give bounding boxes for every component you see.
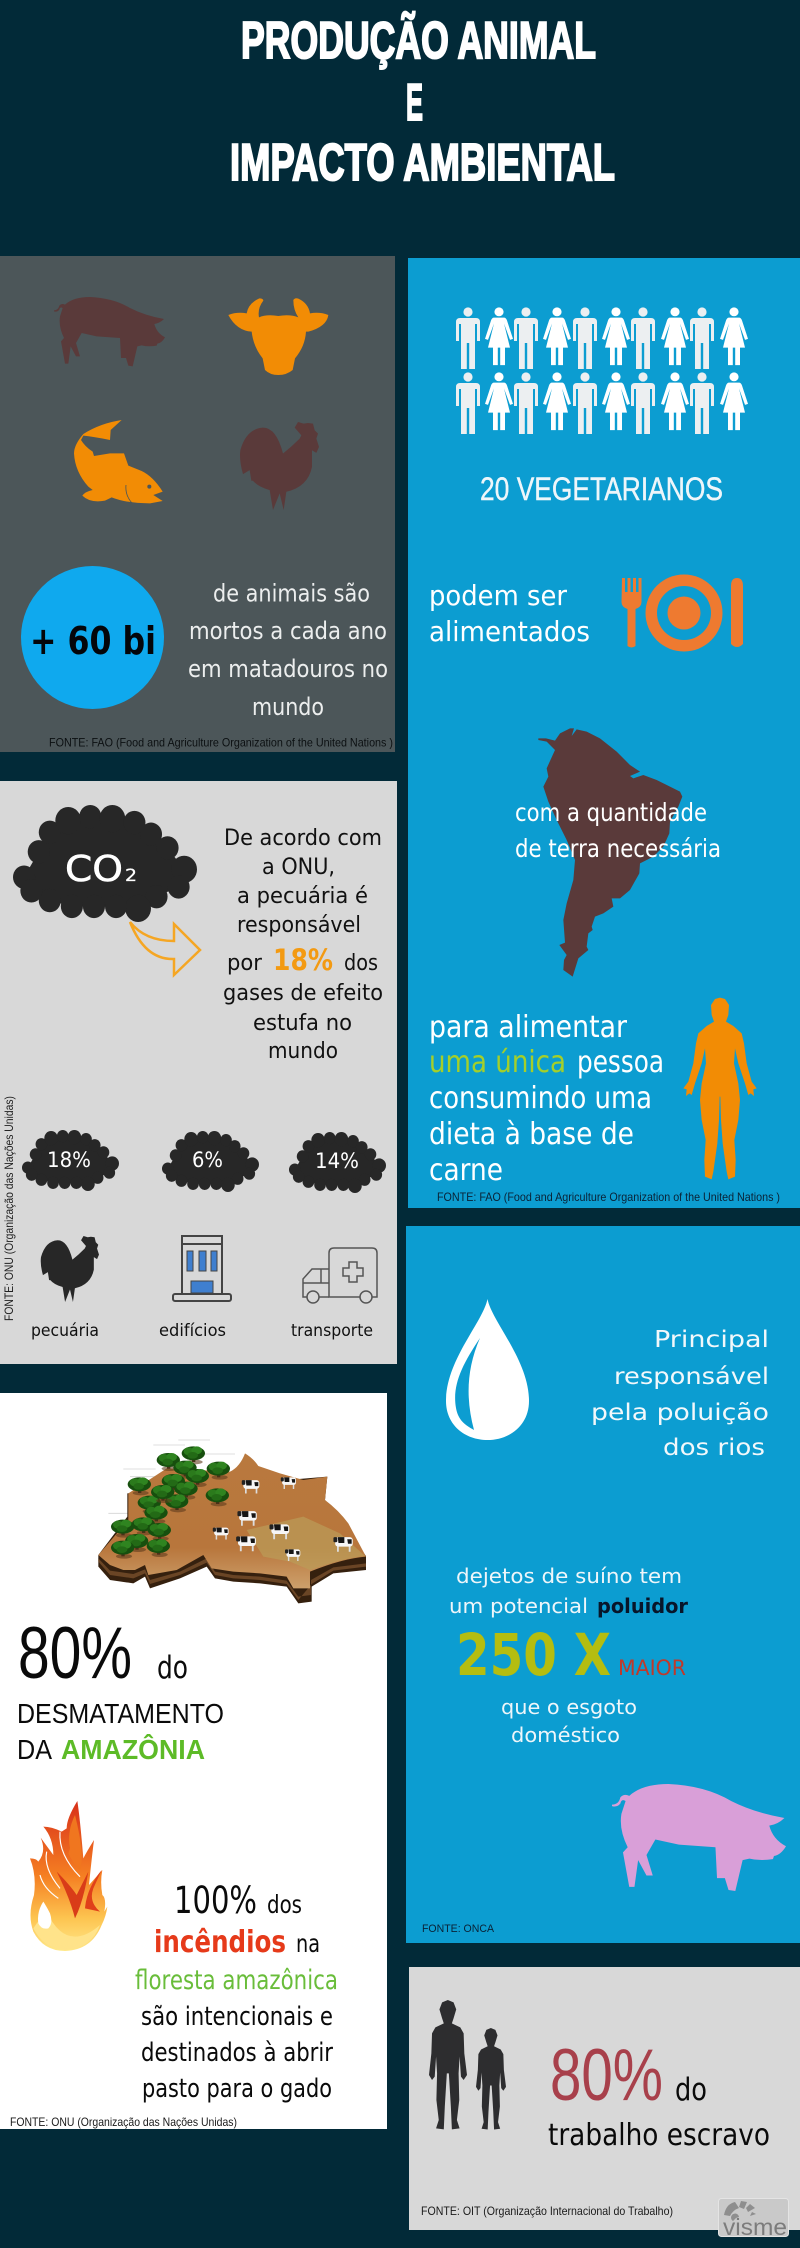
icon: row of people (456, 307, 748, 434)
text: fires: 100% (174, 1879, 257, 1922)
stat: 80% deforestation: DESMATAMENTO (17, 1698, 224, 1729)
badge: visme logo (718, 2198, 788, 2240)
text: fires (135, 1879, 338, 2104)
icon: pink pig (612, 1784, 786, 1891)
panel: slave labour (409, 1967, 800, 2230)
cloud: 14%: 14% (315, 1149, 359, 1173)
text: podem ser alimentados (429, 579, 590, 648)
stat: 80% deforestation: AMAZÔNIA (61, 1733, 205, 1765)
stat: 80% slave labour (548, 2035, 770, 2153)
icon: ambulance (303, 1248, 377, 1303)
cloud: 14% (289, 1132, 386, 1193)
text: principal responsavel: pela poluição (591, 1400, 769, 1426)
labels: sectors: edifícios (159, 1321, 226, 1341)
icon: South America (538, 728, 682, 977)
cloud: 18% (22, 1130, 119, 1191)
icon: pig (54, 297, 165, 366)
text: swine waste stat (449, 1564, 688, 1747)
heading: 20 vegetarianos: 20 VEGETARIANOS (480, 471, 723, 507)
panel: deforestation (0, 1393, 387, 2129)
text: swine waste stat: um potencial (449, 1594, 588, 1618)
arrow (130, 922, 200, 975)
icon: adult and child (429, 2000, 506, 2129)
illustration: deforested Brazil map with cattle (98, 1440, 366, 1603)
text: para alimentar: pessoa (577, 1045, 664, 1080)
text: principal responsavel: Principal (654, 1327, 769, 1353)
panel: vegetarians (408, 258, 800, 1208)
cloud: 6% (162, 1131, 259, 1192)
badge: visme logo: visme (723, 2214, 787, 2240)
text: fires: floresta amazônica (135, 1965, 338, 1996)
source: ONU vertical: FONTE: ONU (Organização das Nações Unidas) (2, 1096, 16, 1321)
source: ONU: FONTE: ONU (Organização das Nações Unidas) (10, 2115, 237, 2129)
text: podem ser alimentados: alimentados (429, 615, 590, 648)
text: fires: destinados à abrir (141, 2038, 333, 2068)
title: E (406, 74, 423, 132)
stat: 80% deforestation: do (157, 1650, 188, 1686)
icon: flame (30, 1801, 107, 1951)
text: principal responsavel: dos rios (663, 1435, 765, 1461)
stat: 80% slave labour: do (675, 2072, 707, 2108)
text: para alimentar: dieta à base de (429, 1117, 634, 1152)
text: ONU statement: 18% (273, 943, 333, 977)
text: animals killed (188, 580, 388, 721)
text: animals killed: mundo (252, 693, 324, 721)
text: para alimentar: para alimentar (429, 1010, 628, 1045)
text: swine waste stat: MAIOR (618, 1656, 686, 1680)
source: ONCA: FONTE: ONCA (422, 1923, 495, 1935)
icon: CO2 cloud: 2 (125, 866, 137, 886)
title (230, 11, 615, 192)
text: ONU statement: De acordo com (224, 826, 382, 851)
text: para alimentar: carne (429, 1153, 503, 1188)
text: ONU statement: responsável (237, 913, 361, 938)
stat: 80% deforestation: 80% (18, 1613, 132, 1694)
cloud: 6%: 6% (192, 1148, 223, 1172)
text: fires: na (296, 1929, 320, 1958)
title: PRODUÇÃO ANIMAL (241, 11, 596, 70)
text: swine waste stat: 250 X (456, 1621, 611, 1689)
source: FAO: FONTE: FAO (Food and Agriculture Organization of the United Nations ) (49, 736, 393, 750)
labels: sectors: pecuária (31, 1321, 99, 1341)
icon: human body (683, 998, 757, 1179)
icon: bull (228, 298, 328, 375)
text: ONU statement: gases de efeito (223, 981, 383, 1006)
cloud: 18%: 18% (47, 1148, 91, 1172)
icon: CO2 cloud (13, 805, 197, 922)
text: swine waste stat: doméstico (511, 1723, 620, 1747)
text: ONU statement: dos (344, 951, 378, 976)
icon: water drop (446, 1299, 529, 1440)
panel: animals killed (0, 256, 395, 752)
text: ONU statement: estufa no (253, 1011, 352, 1036)
text: fires: são intencionais e (141, 2002, 333, 2032)
text: para alimentar: consumindo uma (429, 1081, 652, 1116)
text: quantidade de terra: de terra necessária (515, 834, 721, 863)
panel: water pollution (406, 1226, 800, 1943)
stat: 80% deforestation: DA (17, 1734, 52, 1765)
labels: sectors: transporte (291, 1321, 373, 1341)
text: animals killed: de animais são (213, 580, 370, 608)
text: podem ser alimentados: podem ser (429, 579, 567, 612)
stat: 80% deforestation (17, 1613, 224, 1765)
text: animals killed: em matadouros no (188, 655, 388, 683)
text: principal responsavel (591, 1327, 769, 1461)
stat: 80% slave labour: trabalho escravo (548, 2118, 770, 2153)
text: para alimentar: uma única (429, 1045, 566, 1080)
text: fires: incêndios (154, 1925, 286, 1960)
text: ONU statement: mundo (268, 1039, 338, 1064)
source: OIT: FONTE: OIT (Organização Internacional do Trabalho) (421, 2204, 673, 2218)
text: ONU statement: a pecuária é (237, 884, 368, 909)
icon: building (173, 1236, 231, 1301)
text: animals killed: mortos a cada ano (189, 617, 387, 645)
stat circle: 60 bi (21, 566, 164, 709)
text: swine waste stat: que o esgoto (501, 1695, 637, 1719)
text: swine waste stat: dejetos de suíno tem (456, 1564, 682, 1588)
text: para alimentar (429, 1010, 664, 1188)
icon: plate and cutlery (622, 574, 743, 652)
text: quantidade de terra (515, 798, 721, 863)
text: fires: pasto para o gado (142, 2074, 332, 2104)
labels: sectors (31, 1321, 373, 1341)
icon: rooster (41, 1236, 99, 1302)
icon: rooster (240, 422, 319, 510)
text: quantidade de terra: com a quantidade (515, 798, 707, 827)
icon: fish (74, 420, 163, 503)
text: ONU statement: a ONU, (262, 855, 335, 880)
text: ONU statement (223, 826, 383, 1064)
icon: CO2 cloud: CO (65, 849, 123, 890)
title: IMPACTO AMBIENTAL (230, 134, 615, 192)
panel: greenhouse gases (0, 781, 397, 1364)
text: fires: dos (267, 1890, 302, 1919)
text: principal responsavel: responsável (614, 1364, 769, 1390)
text: ONU statement: por (227, 951, 263, 976)
text: swine waste stat: poluidor (597, 1594, 688, 1618)
stat circle: 60 bi: + 60 bi (30, 619, 156, 663)
stat: 80% slave labour: 80% (550, 2035, 663, 2116)
